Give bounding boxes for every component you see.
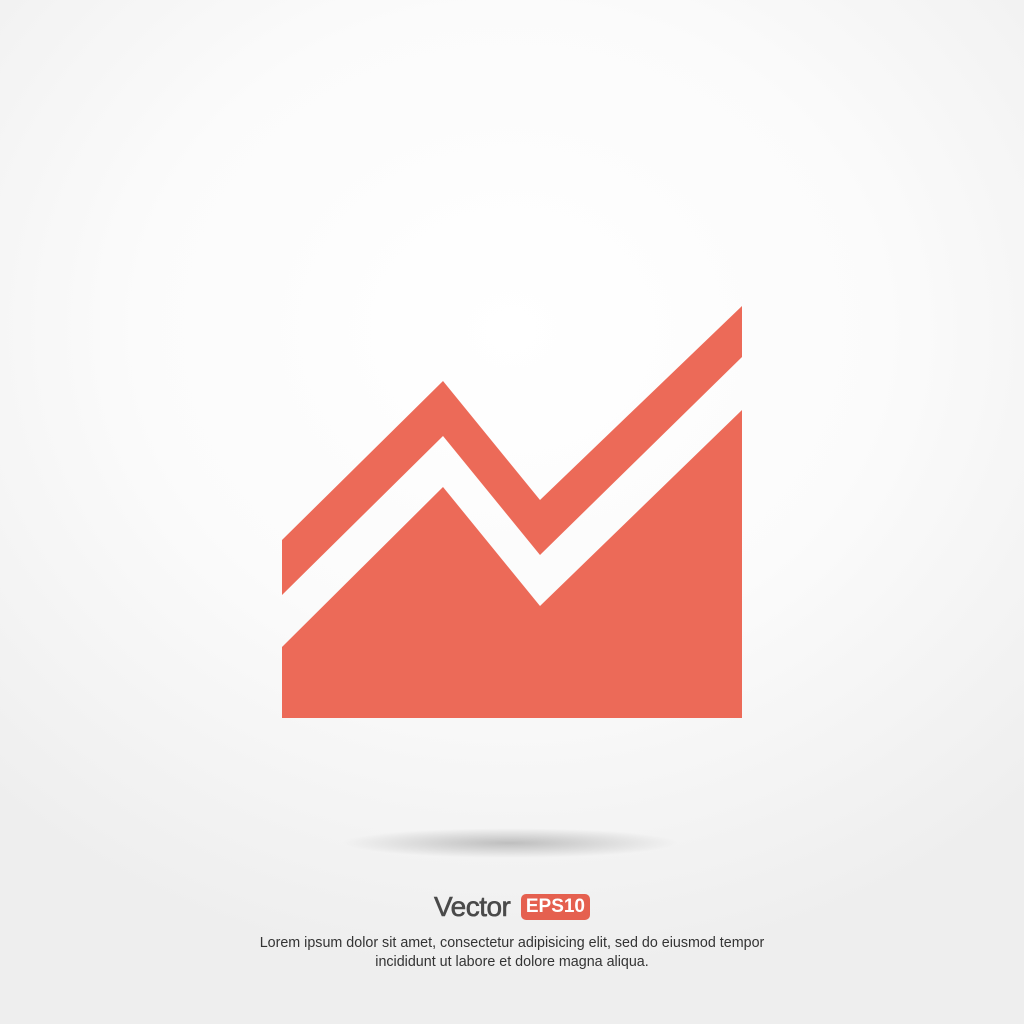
- shadow under chart: [340, 828, 680, 858]
- upper trend band: [282, 306, 742, 595]
- body text: Lorem ipsum dolor sit amet, consectetur adipisicing elit, sed do eiusmod tempor: [260, 935, 764, 951]
- body text: incididunt ut labore et dolore magna aliqua.: [375, 954, 649, 970]
- body text: [260, 935, 764, 970]
- lower area: [282, 410, 742, 718]
- heading: Vector EPS10: [434, 891, 590, 922]
- badge: EPS10: [526, 896, 585, 917]
- badge: [521, 894, 590, 920]
- heading: Vector EPS10: Vector: [434, 891, 510, 922]
